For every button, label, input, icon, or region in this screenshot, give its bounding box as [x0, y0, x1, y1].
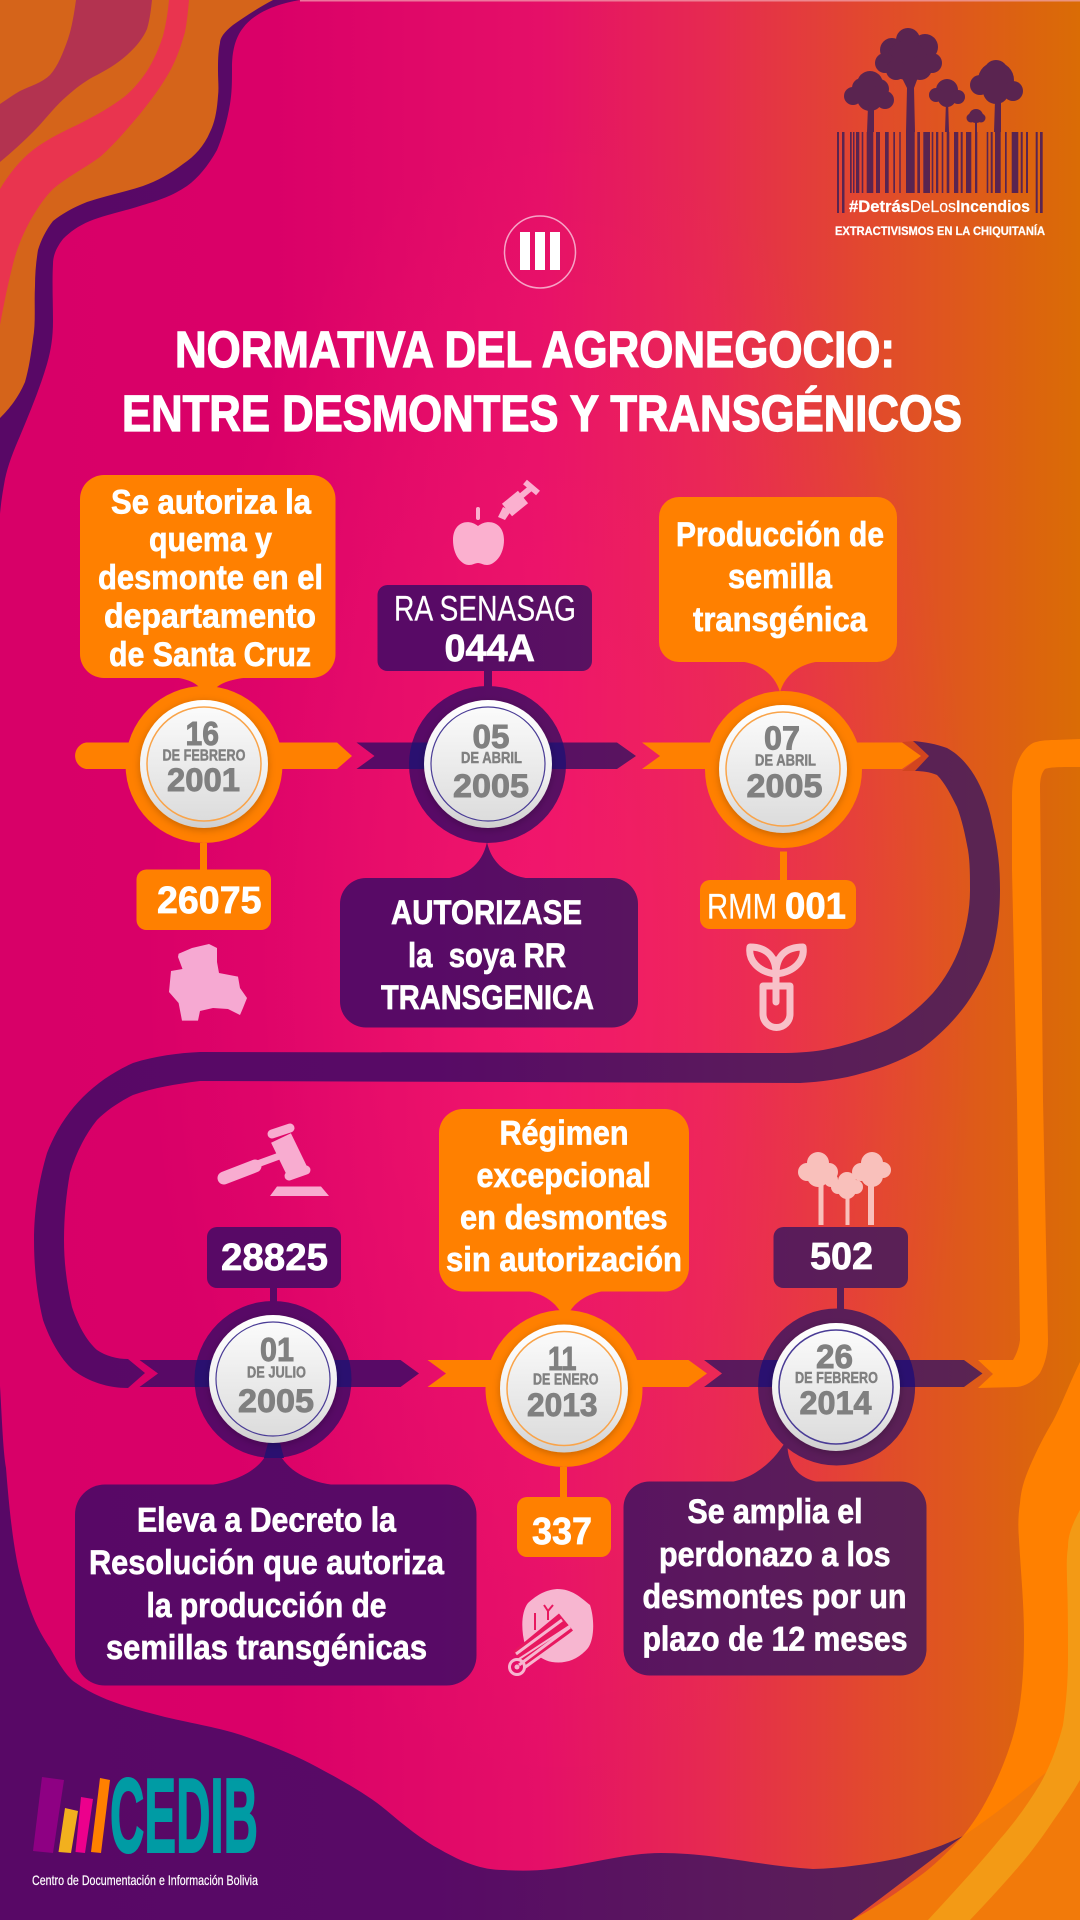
date disc [209, 1315, 337, 1443]
title: NORMATIVA DEL AGRONEGOCIO: [175, 321, 895, 378]
number box 28825 [207, 1227, 341, 1302]
callout: eleva a decreto [75, 1443, 476, 1686]
callout: se autoriza: de Santa Cruz [109, 636, 311, 674]
number box RMM 001 [700, 852, 856, 929]
callout: se autoriza: Se autoriza la [111, 484, 312, 522]
bottom-right orange waves [852, 1362, 1080, 1920]
tagline: Centro de Documentación e Información Bolivia [32, 1872, 258, 1888]
callout: producción de semilla [659, 497, 897, 692]
date disc: 2014 [800, 1385, 872, 1421]
timeline arrow [140, 1360, 419, 1387]
callout: autorizase: la soya RR [408, 937, 566, 975]
timeline arrow [75, 742, 352, 769]
callout: eleva a decreto: semillas transgénicas [106, 1629, 427, 1667]
icon: barcode [837, 132, 1043, 213]
callout: producción de semilla: semilla [728, 558, 833, 596]
callout: régimen excepcional: excepcional [476, 1157, 651, 1195]
callout: se amplia el perdonazo: desmontes por un [642, 1578, 906, 1616]
callout: se autoriza: desmonte en el [98, 559, 323, 597]
date disc: 2001 [167, 762, 240, 798]
icon: gavel [224, 1128, 329, 1196]
callout: eleva a decreto: Resolución que autoriza [89, 1544, 445, 1582]
callout: producción de semilla: Producción de [676, 516, 884, 554]
icon: felled log [510, 1589, 593, 1674]
date disc: DE FEBRERO [162, 748, 246, 764]
icon: apple and syringe [453, 482, 538, 565]
date disc [705, 691, 862, 848]
date disc: 2005 [238, 1383, 314, 1419]
callout: se autoriza: quema y [149, 521, 272, 559]
bottom-left purple wave [0, 1386, 963, 1920]
callout: se amplia el perdonazo: plazo de 12 meses [642, 1620, 908, 1658]
timeline arrow [428, 1360, 707, 1387]
callout: régimen excepcional [439, 1109, 689, 1322]
date ring [758, 1308, 915, 1466]
date disc: DE JULIO [247, 1364, 306, 1382]
callout: se amplia el perdonazo: Se amplia el [688, 1493, 862, 1531]
number box 337 [517, 1467, 611, 1557]
date disc: DE ABRIL [755, 752, 816, 770]
number box RMM 001: RMM [707, 888, 777, 926]
title [122, 321, 962, 442]
date disc: DE ABRIL [461, 750, 522, 767]
icon: Bolivia map [169, 944, 247, 1021]
callout: régimen excepcional: sin autorización [446, 1241, 682, 1279]
hashtag: #Detrás [849, 197, 910, 216]
milestone: 01 de julio 2005 [75, 1128, 476, 1686]
hashtag: Incendios [956, 197, 1030, 216]
logo: Detrás de los incendios [835, 28, 1045, 238]
date disc: 07 [764, 720, 800, 756]
callout: eleva a decreto: la producción de [146, 1587, 386, 1625]
callout: régimen excepcional: en desmontes [460, 1199, 668, 1237]
number box 28825: 28825 [221, 1237, 328, 1279]
title: ENTRE DESMONTES Y TRANSGÉNICOS [122, 385, 962, 442]
date disc: 05 [472, 718, 510, 755]
icon: sprout [750, 947, 803, 1028]
date disc [772, 1323, 900, 1451]
text: CEDIB [110, 1757, 258, 1875]
date disc: 01 [260, 1331, 294, 1368]
milestone: 07 de abril 2005 [642, 497, 921, 1028]
number box 26075: 26075 [157, 880, 262, 922]
icon: coloured book bars [33, 1777, 110, 1853]
callout: se amplia el perdonazo: perdonazo a los [659, 1536, 890, 1574]
number box 502 [774, 1227, 908, 1309]
date disc: 2005 [453, 768, 529, 804]
hashtag [849, 197, 1030, 216]
timeline arrow [642, 742, 921, 769]
icon: three trees [798, 1152, 891, 1225]
milestone: 11 de enero 2013 [428, 1109, 707, 1674]
subtitle: EXTRACTIVISMOS EN LA CHIQUITANÍA [835, 223, 1045, 238]
date disc [486, 1310, 642, 1467]
callout: autorizase [340, 842, 638, 1028]
callout: se autoriza [80, 475, 336, 688]
number box 26075 [136, 843, 271, 930]
section badge III [504, 216, 576, 288]
logo: CEDIB [32, 1757, 258, 1888]
orange connector curve [978, 739, 1080, 1388]
number box 502: 502 [810, 1236, 873, 1278]
milestone: 05 de abril 2005 [340, 482, 638, 1028]
callout: régimen excepcional: Régimen [500, 1114, 628, 1152]
timeline arrow [704, 1360, 982, 1387]
date disc: 2005 [746, 768, 822, 804]
top-left wave decoration [0, 0, 300, 514]
number box 337: 337 [532, 1511, 592, 1553]
date disc: 16 [186, 715, 219, 752]
callout: autorizase: TRANSGENICA [381, 979, 594, 1017]
callout: se autoriza: departamento [104, 598, 316, 636]
date disc [424, 700, 552, 828]
date disc: DE ENERO [533, 1372, 598, 1388]
hashtag: DeLos [910, 197, 956, 216]
date ring [409, 686, 566, 843]
number box RMM 001: 001 [785, 886, 846, 926]
icon: trees [844, 28, 1023, 134]
number box 044A: 044A [444, 628, 535, 670]
date disc: 2013 [527, 1387, 598, 1423]
date disc: DE FEBRERO [795, 1370, 878, 1387]
number box 044A [378, 585, 592, 687]
callout: se amplia el perdonazo [624, 1437, 926, 1676]
date disc: 26 [816, 1338, 853, 1375]
date ring [194, 1301, 352, 1458]
callout: eleva a decreto: Eleva a Decreto la [137, 1502, 397, 1540]
callout: producción de semilla: transgénica [693, 601, 868, 639]
timeline arrow [356, 742, 636, 769]
milestone: 16 de febrero 2001 [75, 475, 352, 1021]
date disc [126, 686, 282, 843]
date disc: 11 [548, 1340, 576, 1377]
callout: autorizase: AUTORIZASE [391, 894, 582, 932]
number box 044A: RA SENASAG [394, 590, 576, 628]
milestone: 26 de febrero 2014 [624, 1152, 982, 1676]
purple connector curve [34, 741, 1000, 1388]
